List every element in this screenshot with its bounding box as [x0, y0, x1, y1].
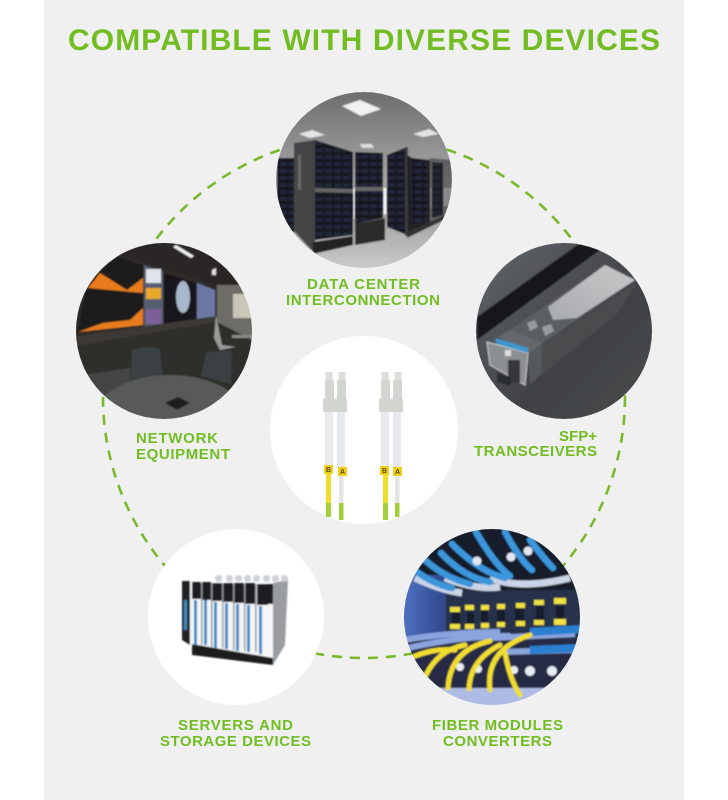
label: SFP+ transceivers — [474, 428, 597, 460]
label: SFP+ transceivers: SFP+ — [559, 428, 597, 445]
label: network equipment: NETWORK — [136, 430, 218, 447]
icon: server rack — [182, 575, 288, 665]
panel: data center photo — [276, 92, 452, 268]
title: COMPATIBLE WITH DIVERSE DEVICES — [68, 24, 660, 57]
label: data center interconnection — [286, 276, 440, 309]
label: network equipment: EQUIPMENT — [136, 446, 230, 463]
label: servers and storage devices: SERVERS AND — [178, 717, 293, 734]
label: data center interconnection: INTERCONNECTION — [286, 292, 440, 309]
icon: duplex LC cable left: A — [340, 469, 345, 476]
label: SFP+ transceivers: TRANSCEIVERS — [474, 443, 597, 460]
dashed connecting ring — [103, 136, 625, 658]
panel: centre fiber cable — [270, 336, 458, 524]
icon: duplex LC cable right: B — [382, 468, 387, 475]
label: fiber modules converters — [432, 717, 563, 750]
label: servers and storage devices: STORAGE DEVICES — [160, 733, 311, 750]
panel: servers and storage — [148, 529, 324, 705]
panel: network equipment photo — [76, 243, 252, 419]
panel: fiber modules photo — [402, 527, 584, 708]
label: data center interconnection: DATA CENTER — [307, 276, 420, 293]
icon: duplex LC cable left — [323, 372, 347, 520]
label: fiber modules converters: CONVERTERS — [443, 733, 552, 750]
label: fiber modules converters: FIBER MODULES — [432, 717, 563, 734]
label: network equipment — [136, 430, 230, 463]
icon: duplex LC cable right: A — [395, 469, 400, 476]
label: servers and storage devices — [160, 717, 311, 750]
icon: duplex LC cable left: B — [326, 467, 331, 474]
icon: duplex LC cable right — [379, 372, 403, 520]
panel: SFP+ transceiver photo — [474, 241, 654, 421]
